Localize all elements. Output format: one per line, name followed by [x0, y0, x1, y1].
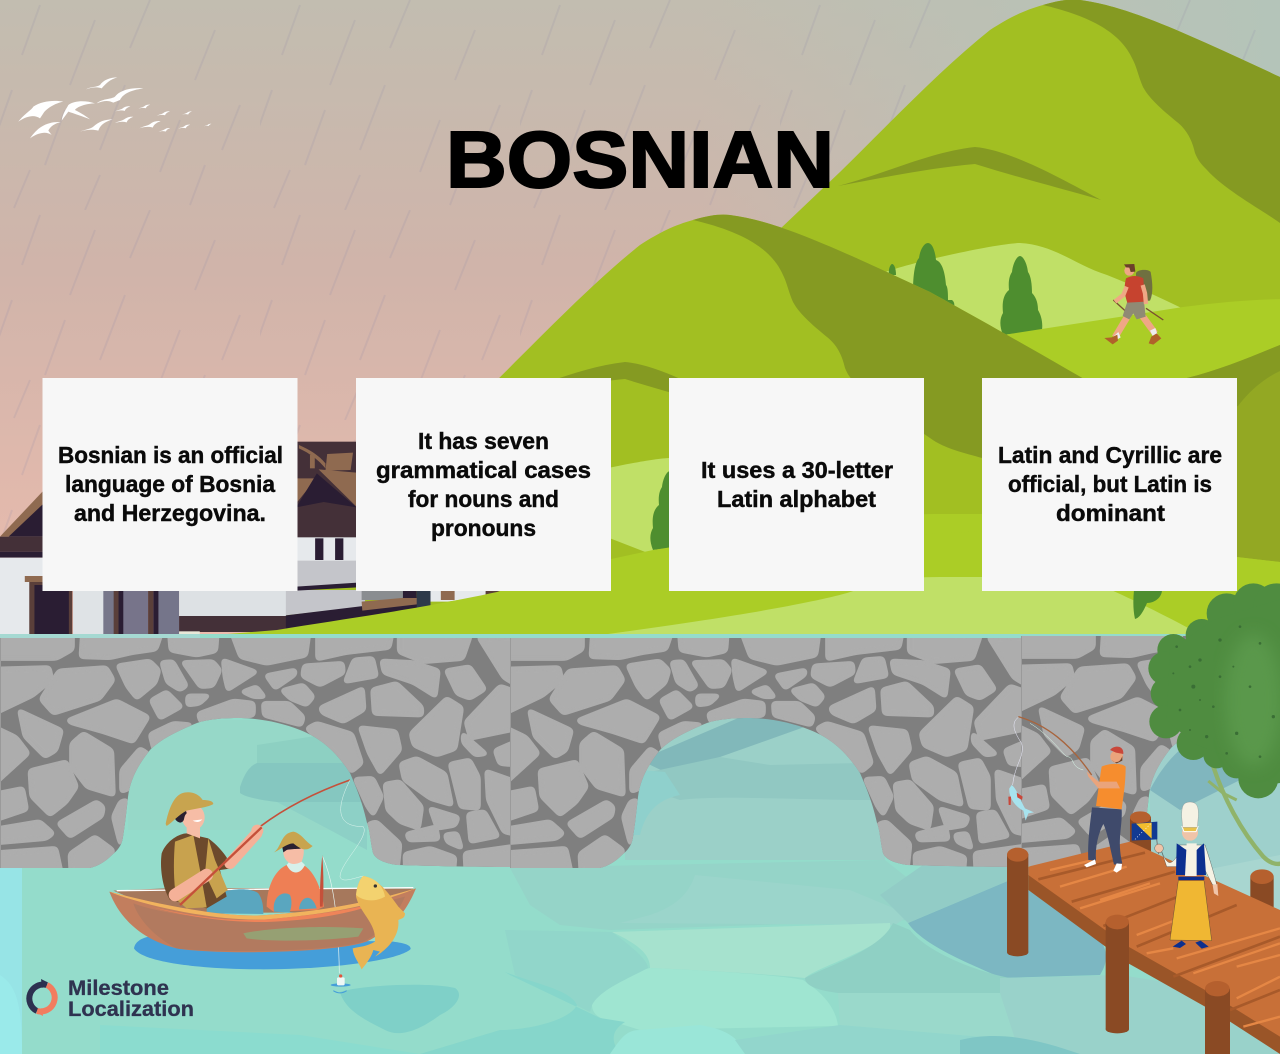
- title: BOSNIAN: [446, 115, 834, 204]
- dock: [1007, 583, 1280, 1054]
- logo wordmark: [68, 977, 194, 1021]
- sky background: [0, 0, 1280, 640]
- card: scripts: official, but Latin is: [1008, 471, 1212, 497]
- angler on dock: [1084, 747, 1126, 873]
- card: official status: [42, 378, 298, 591]
- riverside house: [0, 442, 523, 636]
- river: [0, 634, 1280, 1054]
- card: alphabet: It uses a 30-letter: [701, 457, 893, 483]
- flag of Bosnia and Herzegovina: [1132, 822, 1159, 854]
- man: [161, 792, 263, 914]
- card: grammatical cases: [356, 378, 611, 591]
- water patches under first arch: [128, 720, 370, 850]
- hiker: [1104, 264, 1163, 345]
- card: grammatical cases: for nouns and: [408, 486, 559, 512]
- mid water patches: [100, 923, 1020, 1054]
- card: grammatical cases: It has seven: [418, 428, 549, 454]
- front posts: [1007, 848, 1230, 1054]
- card: scripts: Latin and Cyrillic are: [998, 442, 1222, 468]
- back posts: [1130, 811, 1274, 913]
- boy: [267, 832, 339, 973]
- fishing rod and hooked fish: [1008, 717, 1092, 821]
- water patches near pier: [805, 700, 1280, 1054]
- father and son fishing in a boat: [109, 780, 416, 993]
- card: grammatical cases: grammatical cases: [376, 457, 591, 483]
- card: alphabet: Latin alphabet: [717, 486, 876, 512]
- woman in traditional dress holding flag: [1155, 802, 1218, 949]
- boat shadow: [134, 937, 411, 969]
- card: alphabet: [669, 378, 924, 591]
- logo mark: [29, 979, 55, 1016]
- float: [331, 974, 351, 993]
- stone bridge: [0, 628, 1280, 883]
- front mountain with trees: [250, 215, 1280, 655]
- golden fish: [353, 876, 405, 969]
- tree: [1148, 583, 1280, 864]
- house middle section: [296, 442, 357, 591]
- card: scripts: dominant: [1056, 500, 1165, 526]
- rod over man: [180, 827, 262, 905]
- fishing rod: [260, 780, 350, 827]
- card: official status: language of Bosnia: [65, 471, 275, 497]
- boat hull: [109, 888, 416, 952]
- water patches under second arch: [510, 713, 910, 930]
- birds: [18, 77, 211, 138]
- card: grammatical cases: pronouns: [431, 515, 536, 541]
- boat inside: [113, 888, 413, 913]
- card: official status: Bosnian is an official: [58, 442, 283, 468]
- deck: [1028, 842, 1280, 1054]
- logo wordmark: Milestone: [68, 977, 169, 1000]
- logo wordmark: Localization: [68, 998, 194, 1021]
- card: official status: and Herzegovina.: [74, 500, 266, 526]
- fishing line: [340, 780, 364, 880]
- card: scripts: [982, 378, 1237, 591]
- Milestone Localization logo: [29, 977, 194, 1021]
- right foothill: [1187, 345, 1280, 562]
- foreground ground: [191, 530, 1280, 650]
- back mountain with trees: [600, 0, 1280, 440]
